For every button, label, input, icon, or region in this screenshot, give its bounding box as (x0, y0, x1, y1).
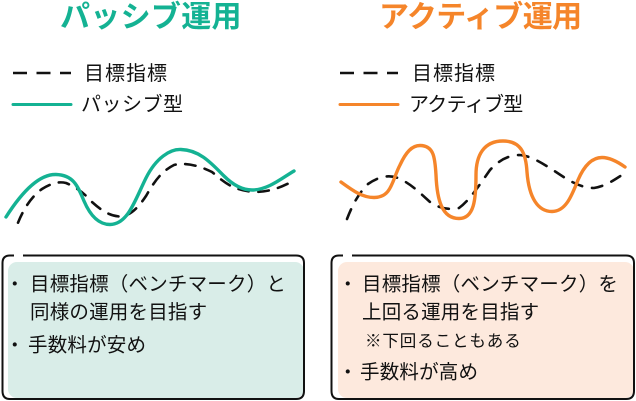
heading: passive: パッシブ運用 (60, 0, 242, 34)
panel: passive management (2, 0, 304, 399)
legend: benchmark dashed: 目標指標 (84, 62, 168, 85)
panel: active management (332, 0, 634, 399)
legend: passive line: パッシブ型 (81, 92, 184, 116)
legend: active line: アクティブ型 (409, 92, 523, 116)
bullet text: active: ・ (338, 362, 358, 384)
legend: benchmark dashed: 目標指標 (412, 62, 496, 85)
callout: passive summary (2, 256, 304, 399)
bullet text: passive: 目標指標（ベンチマーク）と (30, 274, 286, 296)
bullet text: passive (5, 274, 286, 356)
bullet text: active: 上回る運用を目指す (362, 302, 539, 324)
bullet text: passive: 手数料が安め (28, 334, 146, 356)
bullet text: active (338, 274, 618, 384)
bullet text: active: 目標指標（ベンチマーク）を (362, 274, 618, 296)
callout: active summary (332, 256, 634, 399)
bullet text: active: ※下回ることもある (365, 332, 522, 350)
bullet text: passive: ・ (5, 334, 25, 356)
chart: active vs benchmark (341, 141, 625, 219)
bullet text: active: ・ (338, 274, 358, 296)
bullet text: passive: 同様の運用を目指す (30, 302, 207, 324)
heading: active: アクティブ運用 (379, 0, 582, 34)
chart: passive vs benchmark (6, 149, 294, 224)
bullet text: passive: ・ (5, 274, 25, 296)
bullet text: active: 手数料が高め (360, 362, 478, 384)
